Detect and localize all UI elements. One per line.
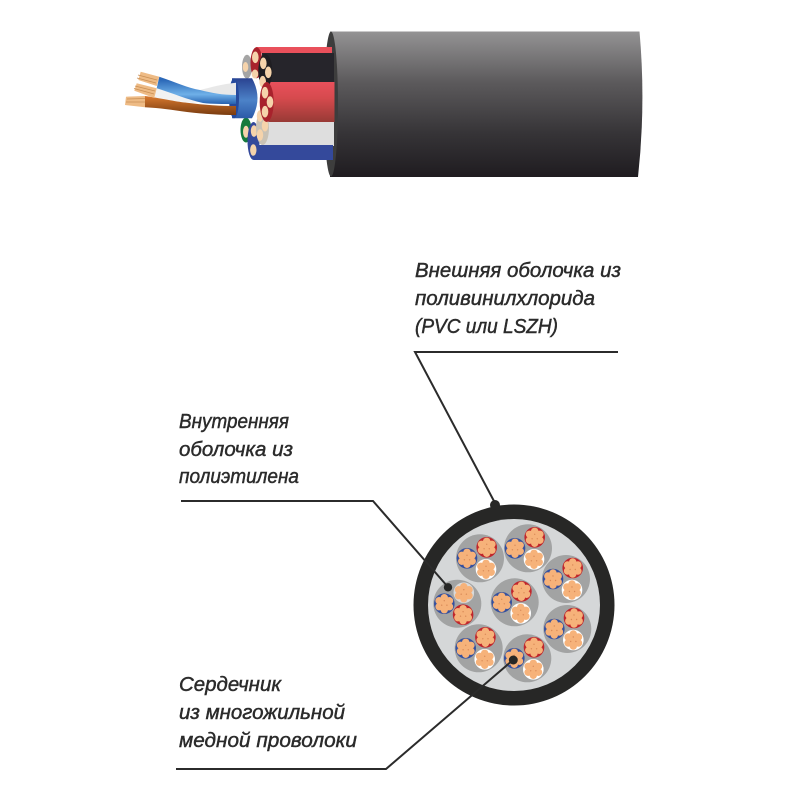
label: copper core: из многожильной xyxy=(179,702,345,724)
label: inner sheath xyxy=(179,411,299,488)
bundle 8 xyxy=(503,634,551,682)
stripped copper wires xyxy=(125,72,236,115)
label: inner sheath: оболочка из xyxy=(179,439,293,461)
bundle 3 xyxy=(542,555,590,603)
label: copper core xyxy=(179,674,357,752)
label: copper core: медной проволоки xyxy=(179,730,357,752)
bundle 7 xyxy=(455,624,503,672)
label: outer sheath xyxy=(415,260,621,338)
bundle 6 xyxy=(543,605,591,653)
cable side view illustration xyxy=(125,32,642,177)
bundle 5 xyxy=(433,580,481,628)
label: inner sheath: Внутренняя xyxy=(179,411,289,433)
label: outer sheath: поливинилхлорида xyxy=(415,288,595,310)
cable cross-section xyxy=(414,500,614,706)
copper core leader line xyxy=(176,656,518,769)
label: outer sheath: Внешняя оболочка из xyxy=(415,260,621,282)
bundle 4 xyxy=(491,578,539,626)
label: inner sheath: полиэтилена xyxy=(179,466,299,488)
bundle 1 xyxy=(456,534,504,582)
inner coloured conductors xyxy=(240,47,336,160)
label: copper core: Сердечник xyxy=(179,674,283,696)
inner sheath leader line xyxy=(181,501,452,592)
outer jacket xyxy=(320,32,642,177)
label: outer sheath: (PVC или LSZH) xyxy=(415,316,558,338)
outer sheath leader line xyxy=(415,352,618,503)
blue inner sleeve xyxy=(229,78,258,118)
bundle 2 xyxy=(504,524,552,572)
